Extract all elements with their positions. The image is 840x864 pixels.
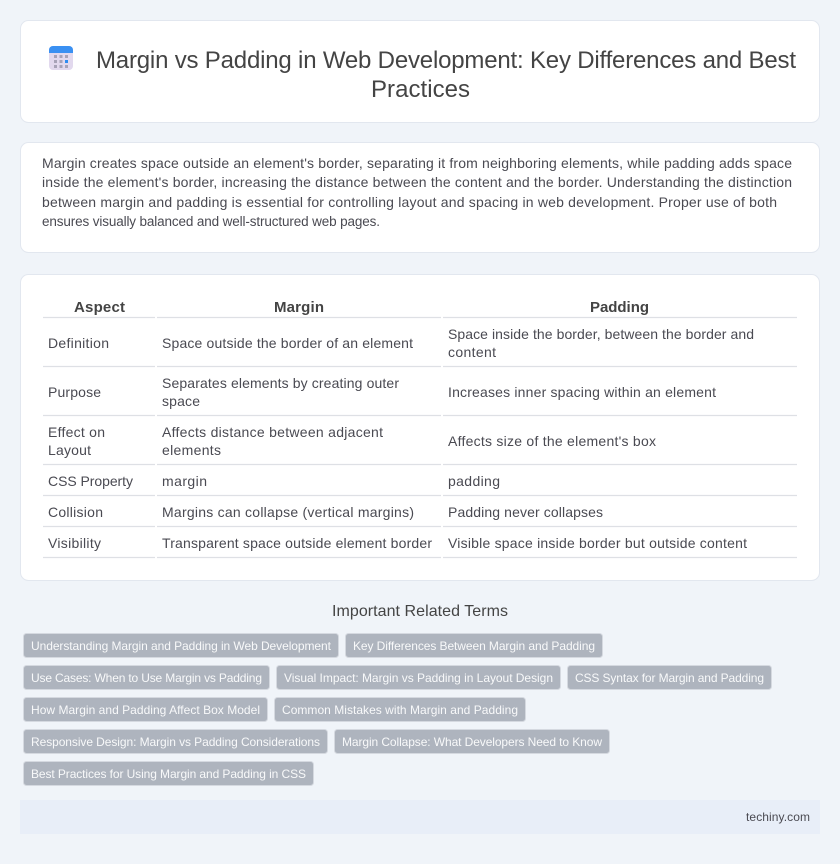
row: collision [48,504,603,520]
row: css property: margin [162,473,207,489]
table header: Padding [590,299,649,316]
row: visibility: Visible space inside border but outside content [448,535,747,551]
row: visibility [48,535,747,551]
row: css property: padding [448,473,500,489]
footer bar: techiny.com [746,810,810,824]
row: purpose: Separates elements by creating outer [162,375,399,391]
tag [568,666,772,690]
row: css property [48,473,500,489]
tag: How Margin and Padding Affect Box Model [31,703,260,717]
tag [276,666,560,690]
row: effect on layout: Affects distance between adjacent [162,424,383,440]
row: visibility: Transparent space outside element border [162,535,432,551]
tag: Visual Impact: Margin vs Padding in Layout Design [284,671,553,685]
table header [74,299,649,316]
tag [24,698,268,722]
row: purpose: space [162,393,200,409]
tag: Use Cases: When to Use Margin vs Padding [31,671,262,685]
tag: Margin Collapse: What Developers Need to Know [342,735,602,749]
title: Margin vs Padding in Web Development: Key Differences and Best [96,47,796,74]
related terms tags [24,634,772,786]
row: effect on layout [48,424,656,458]
row: purpose: Purpose [48,384,101,400]
heading: important related terms: Important Related Terms [332,603,508,620]
row: visibility: Visibility [48,535,101,551]
row: collision: Collision [48,504,103,520]
row: definition: content [448,344,496,360]
row: effect on layout: Effect on [48,424,105,440]
table header: Margin [274,299,324,316]
row: collision: Padding never collapses [448,504,603,520]
tag [24,730,328,754]
tag [334,730,610,754]
row: purpose: Increases inner spacing within an element [448,384,716,400]
tag: Common Mistakes with Margin and Padding [282,703,518,717]
tag: Responsive Design: Margin vs Padding Considerations [31,735,320,749]
table header: Aspect [74,299,125,316]
row: definition: Space outside the border of an element [162,335,413,351]
panel: introduction [20,142,820,252]
row: css property: CSS Property [48,473,133,489]
title [96,47,796,103]
row: effect on layout: Affects size of the element's box [448,433,656,449]
panel: title card [20,20,820,122]
footer bar [20,800,820,834]
tag [24,762,314,786]
title: Practices [371,76,470,103]
tag [24,634,338,658]
intro text: inside the element's border, increasing the distance between the content and the border. Understanding the distinction [42,174,792,190]
row: definition: Definition [48,335,109,351]
intro text: between margin and padding is essential for controlling layout and spacing in web development. Proper use of both [42,194,777,210]
panel: comparison table [20,274,820,580]
row: effect on layout: elements [162,442,221,458]
tag [24,666,270,690]
tag: Understanding Margin and Padding in Web Development [31,639,332,653]
intro text: ensures visually balanced and well-structured web pages. [42,214,380,229]
row: definition: Space inside the border, between the border and [448,326,754,342]
row: definition [48,326,754,360]
tag [346,634,602,658]
row: collision: Margins can collapse (vertical margins) [162,504,414,520]
intro text [42,155,792,229]
tag: Key Differences Between Margin and Padding [353,639,595,653]
row: purpose [48,375,716,409]
row: effect on layout: Layout [48,442,91,458]
tag: CSS Syntax for Margin and Padding [575,671,764,685]
icon: calendar [49,46,73,70]
tag [274,698,526,722]
tag: Best Practices for Using Margin and Padding in CSS [31,767,306,781]
intro text: Margin creates space outside an element's border, separating it from neighboring elements, while padding adds space [42,155,792,171]
